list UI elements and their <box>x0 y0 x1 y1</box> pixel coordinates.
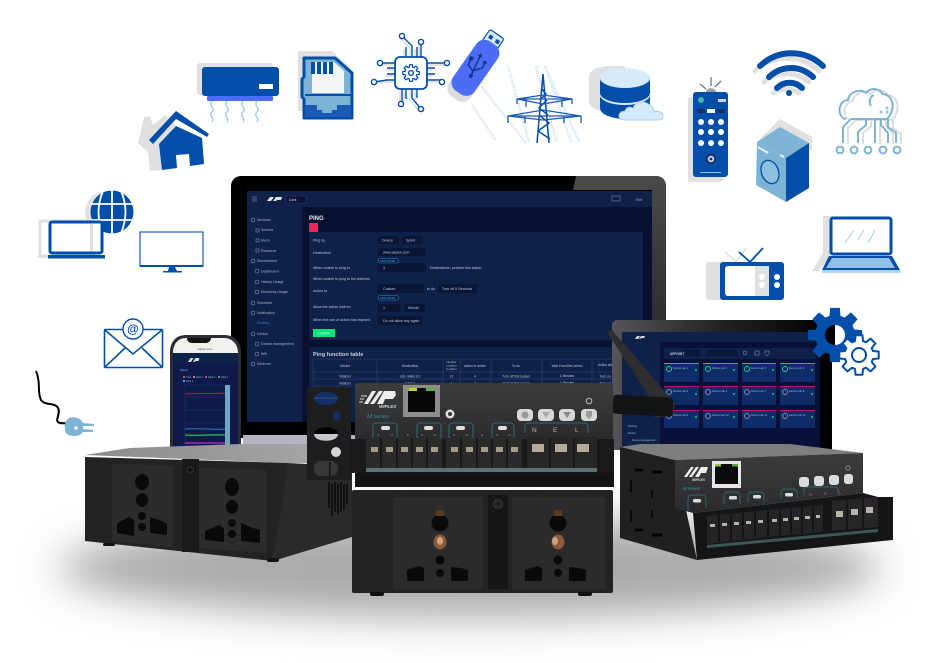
laptop screen: action in action <box>464 364 486 368</box>
icon: washing machine <box>756 119 812 202</box>
center device connector labels: N <box>496 433 498 437</box>
center device connector labels: L2 <box>433 433 437 437</box>
smartphone: Total <box>186 376 192 379</box>
laptop screen: to do <box>427 287 435 291</box>
tablet screen <box>622 332 820 448</box>
tablet screen: Device Lab 8 <box>789 389 805 393</box>
center device connector labels: E <box>407 433 409 437</box>
smartphone <box>170 335 241 447</box>
laptop screen: Sections <box>257 218 271 222</box>
icon: database cloud <box>589 66 663 120</box>
tablet screen: Device Lab 2 <box>712 366 728 370</box>
laptop screen: to action <box>446 367 457 371</box>
laptop screen: Routing <box>257 321 269 325</box>
laptop screen: Number <box>447 360 457 364</box>
tablet screen: APPOINT <box>670 352 684 356</box>
laptop screen: Wifi <box>261 352 267 356</box>
laptop screen: Turn on <box>599 382 611 386</box>
smartphone: Data 4 <box>186 380 194 383</box>
laptop screen: Resource <box>261 249 276 253</box>
smartphone: Data 3 <box>221 376 229 379</box>
icon: laptop <box>812 216 901 273</box>
laptop screen: Allow the action wait for <box>313 305 352 309</box>
center device logo: M series <box>367 414 389 420</box>
laptop screen: Action to <box>313 289 327 293</box>
laptop screen: 1 Minutes <box>560 374 574 378</box>
laptop screen: Device management <box>261 342 294 346</box>
center device connector labels: L4 <box>508 433 512 437</box>
right device with terminal blocks <box>620 444 893 560</box>
laptop screen: Do not allow any again <box>383 319 419 323</box>
center device status icons <box>446 398 597 421</box>
right device logo: M series <box>683 486 701 491</box>
left device vents <box>329 482 347 516</box>
center device connector labels: N <box>421 433 423 437</box>
smartphone: Select <box>180 368 189 372</box>
center device connector labels: N <box>532 427 537 434</box>
tablet screen: Device Lab 11 <box>751 413 768 417</box>
laptop screen: Dashboard <box>261 270 279 274</box>
laptop screen: Ping by <box>313 238 325 242</box>
center device connector labels: L3 <box>465 433 469 437</box>
center device RJ45 port <box>403 385 440 417</box>
gears icon <box>808 308 879 375</box>
right device with terminal blocks: L <box>839 490 842 495</box>
right device RJ45 port <box>712 461 741 488</box>
tablet screen: Device Lab 10 <box>712 413 729 417</box>
laptop screen: Device <box>340 364 350 368</box>
laptop screen: Restart this socket <box>502 382 530 386</box>
laptop screen: Ping function table <box>313 352 363 358</box>
center device connector labels: N <box>377 433 379 437</box>
icon: wifi <box>755 53 823 96</box>
center device socket box <box>352 490 613 596</box>
laptop screen: Destinations, perform this action. <box>430 266 482 270</box>
right device with terminal blocks: N <box>809 492 812 497</box>
laptop screen: To do <box>512 364 520 368</box>
tablet screen: Device <box>628 431 636 435</box>
laptop screen: Vitalizer <box>339 382 352 386</box>
laptop screen: Ethernet <box>257 362 271 366</box>
center device connector labels: L <box>575 427 579 434</box>
laptop screen: Turn on <box>599 374 611 378</box>
laptop screen: Sectors <box>261 228 273 232</box>
center device top body <box>355 383 613 441</box>
right device side details <box>635 470 662 535</box>
icon: envelope: @ <box>127 322 139 336</box>
center device terminal blocks <box>350 437 614 487</box>
laptop screen: Electricity Usage <box>261 290 288 294</box>
icon: usb drive <box>444 28 509 106</box>
laptop screen: Secondment <box>257 259 277 263</box>
tablet screen: Device Lab 6 <box>712 389 728 393</box>
right device logo <box>683 467 708 491</box>
center device connector labels: L1 <box>390 433 394 437</box>
tablet screen: Device Lab 9 <box>673 413 689 417</box>
laptop screen: Usb. Mikro E3 <box>400 374 421 378</box>
laptop screen: Turn off this socket <box>502 374 530 378</box>
laptop screen: Device <box>257 332 268 336</box>
laptop screen: Splint <box>406 238 415 242</box>
tablet screen: Device Lab 1 <box>673 366 689 370</box>
icon: memory card <box>298 51 352 118</box>
laptop screen: 4 <box>474 382 476 386</box>
icon: laptop and globe <box>38 190 134 258</box>
tablet screen: Device Lab 7 <box>751 389 767 393</box>
laptop screen: Custom <box>383 287 395 291</box>
laptop screen: Destination <box>402 364 418 368</box>
smartphone: Data 2 <box>208 376 216 379</box>
center device connector labels: E <box>481 433 483 437</box>
center device connector labels: N <box>453 433 455 437</box>
icon: remote control <box>688 77 728 182</box>
tablet with device dashboard <box>612 320 832 450</box>
laptop screen: Action wh <box>598 363 612 367</box>
laptop screen: Turn off 5 Seconds <box>442 287 472 291</box>
laptop screen: History Usage <box>261 280 284 284</box>
ground shadow <box>58 518 882 618</box>
icon: cloud network <box>837 89 901 153</box>
icon: processor chip with gear <box>371 33 450 112</box>
right device terminal strip <box>707 497 878 548</box>
laptop screen: Dark <box>289 198 297 202</box>
icon: monitor <box>140 232 203 272</box>
laptop screen: Schedule <box>257 301 272 305</box>
smartphone: wiplex.com <box>198 347 213 351</box>
laptop screen: PING <box>309 216 324 222</box>
laptop screen: When the use of action has elapsed <box>313 318 370 322</box>
laptop screen: ADD MORE <box>380 259 395 263</box>
laptop screen: 8.8.8.8 <box>405 382 415 386</box>
laptop screen: When unable to ping to <box>313 266 350 270</box>
center device bracket <box>307 387 351 480</box>
laptop screen: Notification <box>257 311 275 315</box>
laptop screen: Mesh <box>261 238 270 242</box>
laptop screen: Destination <box>313 251 331 255</box>
laptop screen: 3 <box>383 266 385 270</box>
tablet screen: Device Lab 12 <box>789 413 806 417</box>
laptop screen: Wait if another action <box>552 364 583 368</box>
tablet screen: Device Lab 4 <box>789 366 805 370</box>
icon: television <box>706 248 784 300</box>
laptop screen: 1 Minutes <box>560 381 574 385</box>
icon: house <box>138 111 209 171</box>
icon: envelope <box>104 319 162 368</box>
right device logo: WIPLEX <box>692 478 706 482</box>
laptop screen: 12 <box>450 374 453 378</box>
center device connector labels <box>373 423 588 439</box>
icon: electricity pylon <box>472 66 581 143</box>
wifi antenna <box>607 330 675 418</box>
laptop screen: Vitalizer <box>339 374 352 378</box>
center device logo <box>359 391 397 420</box>
laptop screen: Minute <box>408 306 419 310</box>
laptop screen: Exit <box>636 198 642 202</box>
laptop screen: ADD MORE <box>380 296 395 300</box>
tablet screen: Routing <box>628 424 637 428</box>
center device connector labels: E <box>553 427 558 434</box>
icon: plug and cable <box>36 371 94 436</box>
tablet screen: Device management <box>632 438 656 442</box>
right device with terminal blocks: E <box>824 491 827 496</box>
center device logo: WIPLEX <box>379 404 397 409</box>
icon: air conditioner <box>197 63 279 122</box>
laptop screen: 4 <box>474 374 476 378</box>
laptop screen: Confirm <box>318 332 330 336</box>
laptop screen: www.wiplex.com <box>383 250 409 254</box>
laptop screen: When unable to ping to the Address <box>313 277 370 281</box>
smartphone: Data 1 <box>196 376 204 379</box>
laptop screen: 1 <box>451 382 453 386</box>
laptop with ping dashboard <box>231 176 666 446</box>
laptop screen: 1 <box>383 306 385 310</box>
laptop screen: Device <box>382 238 393 242</box>
center device with terminal blocks and sockets <box>307 383 614 596</box>
tablet screen: Device Lab 5 <box>673 389 689 393</box>
left device with two sockets <box>85 444 352 562</box>
laptop screen: of action <box>446 364 457 368</box>
laptop screen <box>247 191 652 422</box>
tablet screen: Device Lab 3 <box>751 366 767 370</box>
